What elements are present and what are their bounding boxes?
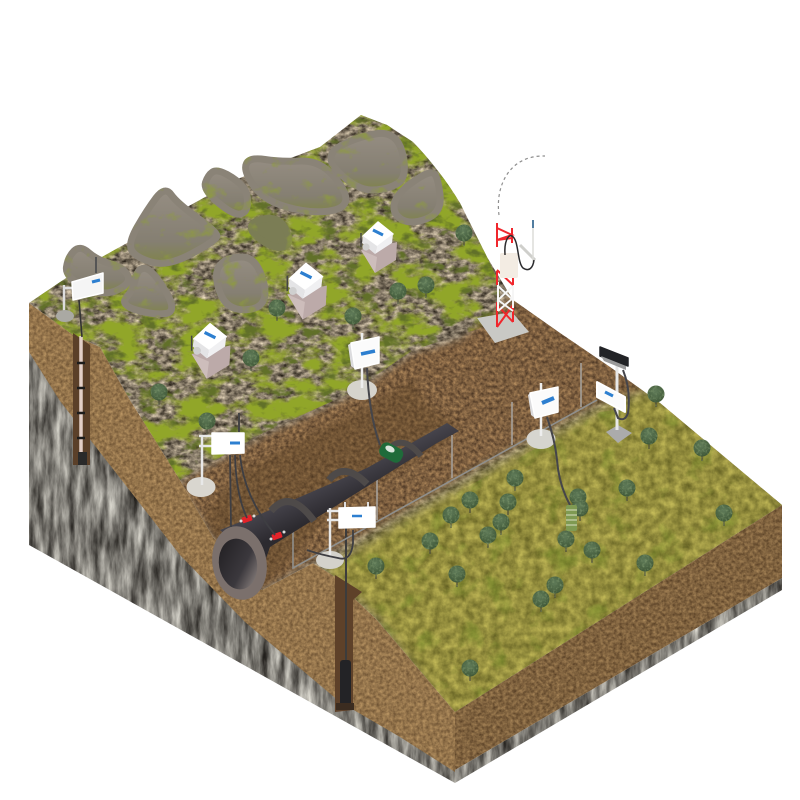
excavated trench ground — [178, 290, 650, 590]
fence wire — [293, 400, 597, 568]
antenna — [95, 257, 97, 273]
logger box — [339, 507, 375, 528]
display — [352, 515, 362, 517]
antennas — [345, 502, 368, 509]
antenna — [238, 413, 240, 432]
front borehole — [335, 528, 362, 712]
dark moss patches — [29, 115, 500, 480]
rod end — [78, 452, 87, 465]
meadow grass — [320, 388, 800, 730]
sensor rod — [79, 336, 83, 455]
base — [56, 310, 74, 322]
pipe flange — [206, 522, 273, 604]
cable to green sensor — [367, 368, 380, 445]
hillside surface — [29, 115, 782, 712]
green pipe sensor — [377, 440, 405, 465]
bedrock front face — [29, 352, 782, 783]
cable — [614, 370, 629, 419]
radio tower — [477, 156, 545, 343]
trench inner wall — [205, 381, 458, 588]
pole — [327, 508, 340, 556]
pipe — [206, 423, 459, 604]
logger box — [351, 337, 379, 369]
camera body — [600, 347, 628, 366]
upper tower section — [497, 223, 513, 285]
logger box — [212, 433, 244, 454]
pedestal logger: middle — [287, 264, 327, 320]
fence posts — [377, 363, 581, 520]
fence — [293, 363, 597, 568]
concrete base — [316, 551, 344, 569]
pipe collar — [329, 471, 367, 484]
white lattice — [498, 282, 513, 311]
concrete pad — [477, 312, 529, 343]
boulder — [251, 218, 289, 248]
logger box — [597, 382, 625, 412]
antenna rod — [532, 228, 534, 262]
boulders — [66, 133, 440, 314]
pole — [199, 435, 212, 485]
clamp — [240, 514, 256, 524]
dashed wireless signal arc — [498, 156, 545, 215]
boulder — [246, 159, 346, 212]
moss patches — [29, 115, 500, 480]
pole — [540, 383, 542, 436]
top-left logger station — [56, 257, 103, 322]
meadow surface — [320, 388, 800, 730]
borehole probe — [340, 660, 351, 706]
borehole cable — [345, 528, 347, 662]
camera mount — [601, 356, 626, 370]
concrete base — [347, 380, 377, 400]
pole — [616, 365, 618, 430]
logger box — [72, 273, 103, 300]
pole — [64, 285, 73, 312]
camera station — [597, 347, 632, 443]
boulder — [205, 171, 248, 214]
logger box side — [348, 343, 355, 369]
front logger station — [307, 502, 375, 569]
pipe opening — [215, 536, 261, 592]
upper-hill wall logger — [347, 333, 380, 445]
red clamps on pipe — [240, 514, 286, 541]
meadow logger station — [526, 383, 570, 505]
cables — [230, 455, 275, 535]
enclosure — [500, 253, 518, 278]
logger box — [530, 387, 558, 418]
pedestal logger: lower — [192, 324, 231, 379]
boulder — [131, 191, 217, 263]
soil right face — [455, 505, 782, 770]
concrete base — [186, 477, 216, 497]
trench logger station — [186, 413, 275, 535]
soil probe cylinder — [566, 505, 577, 531]
pole — [361, 333, 363, 388]
borehole shaft — [335, 575, 362, 712]
concrete base — [526, 429, 556, 449]
bushes — [150, 224, 732, 681]
antenna arm — [520, 245, 535, 260]
logger box side — [528, 393, 535, 418]
base — [606, 425, 632, 443]
pedestal logger: upper — [361, 222, 397, 273]
pipe collar — [271, 502, 314, 521]
boulder — [394, 173, 440, 222]
cable to soil probe — [547, 417, 570, 505]
display — [361, 351, 375, 354]
illustration: isometric hillside monitoring site — [29, 115, 782, 783]
meadow green patches — [342, 410, 739, 696]
display — [92, 280, 100, 282]
pipe collar — [391, 443, 421, 456]
lower tower section — [497, 302, 513, 327]
boulder — [66, 248, 129, 293]
borehole shaft — [73, 333, 90, 465]
clamp — [270, 530, 286, 541]
pipe body — [220, 423, 459, 570]
display — [542, 398, 554, 403]
boulder — [331, 133, 404, 190]
antenna cable — [505, 236, 534, 270]
stony ground — [29, 115, 782, 712]
display — [230, 442, 240, 444]
left borehole — [73, 300, 90, 465]
boulder — [216, 257, 265, 310]
side cable — [307, 530, 353, 559]
soil left face — [29, 303, 455, 772]
boulder — [125, 268, 172, 314]
rod cable — [79, 300, 82, 337]
display — [605, 392, 613, 396]
